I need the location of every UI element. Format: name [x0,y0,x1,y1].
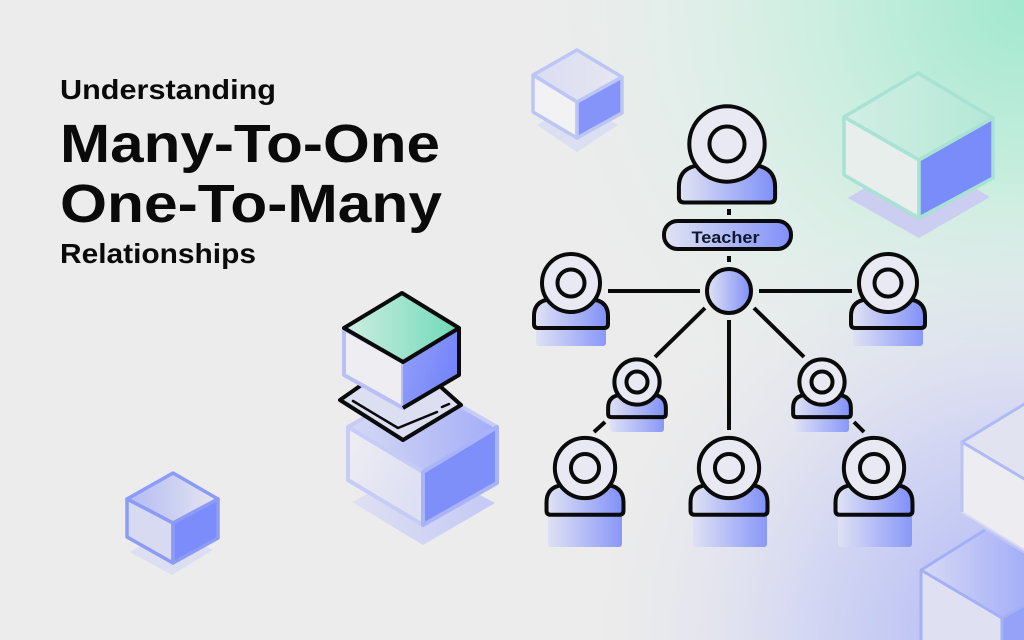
person: mid right [793,359,851,432]
cube: stacked centre base [348,384,497,545]
heading: many-to-one: Many-To-One [60,114,440,174]
person: bottom centre [691,438,767,547]
cube: bottom left small [127,473,218,575]
heading: one-to-many: One-To-Many [60,174,442,234]
label: teacher: Teacher [692,228,760,247]
label: teacher [664,221,791,249]
person: teacher [679,106,775,202]
heading: relationships: Relationships [60,238,256,269]
heading: understanding: Understanding [60,74,276,105]
cube: top small [533,50,622,152]
person: bottom right [836,438,912,547]
central hub [707,269,751,313]
title [60,74,442,269]
icon: flat plate [340,380,461,440]
teacher node [664,106,791,249]
person: bottom left [547,438,623,547]
person: left upper [534,254,608,346]
cube: right edge [962,403,1024,551]
person: mid left [608,359,666,432]
cube: top right green [844,73,993,238]
person: right upper [851,254,925,346]
connector lines [594,209,864,432]
cube: bottom right edge [921,530,1024,640]
cube: stacked centre top green [344,293,459,408]
